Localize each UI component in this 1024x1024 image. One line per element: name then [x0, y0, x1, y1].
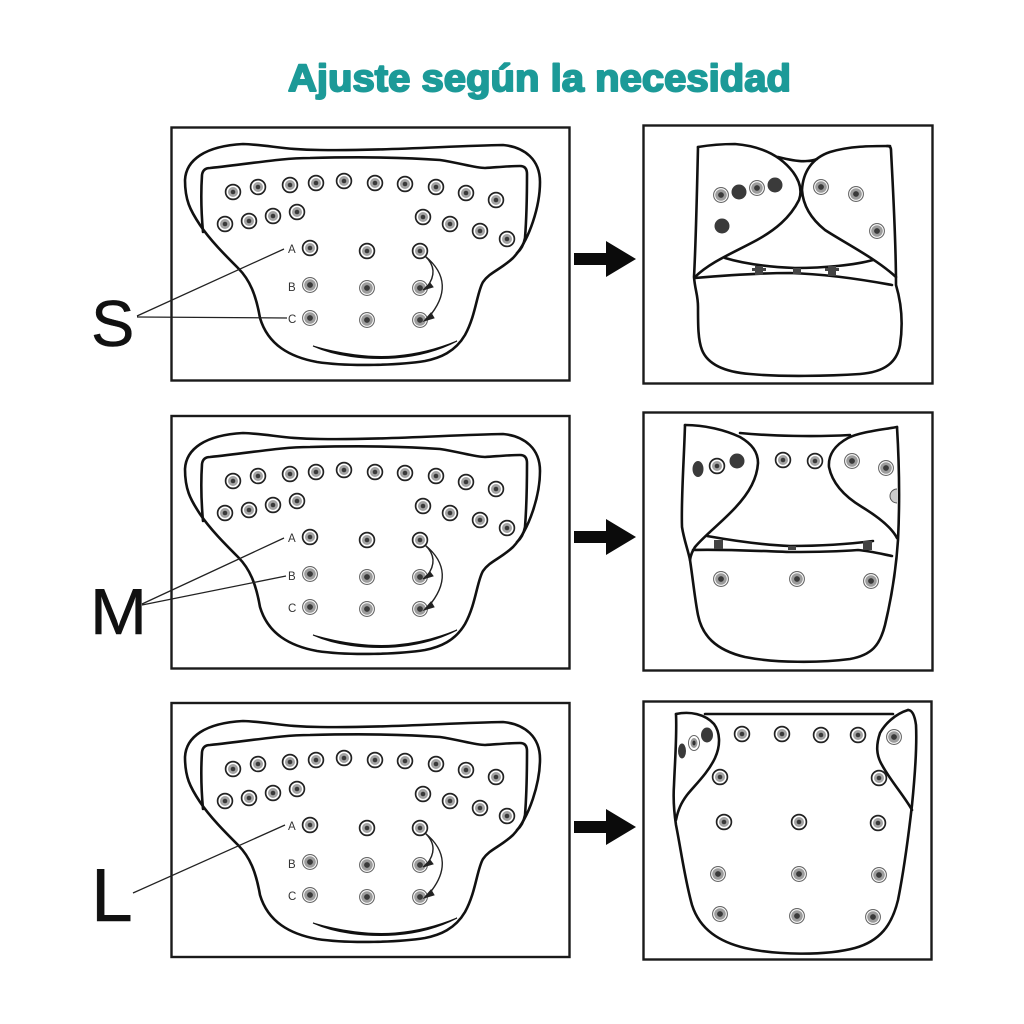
- panel: size S snap diagram: [172, 128, 570, 380]
- label: size L: L: [91, 853, 133, 937]
- label: size S: [91, 249, 287, 360]
- diaper L open: [185, 721, 540, 942]
- title: Ajuste según la necesidad: [288, 58, 791, 100]
- label: size M: M: [90, 575, 147, 648]
- panel: size M fastened diaper: [644, 412, 932, 670]
- snap tabs: [752, 266, 839, 276]
- panel: size L fastened diaper: [644, 702, 932, 960]
- diaper S open: [185, 144, 540, 365]
- arrow M: [574, 519, 636, 555]
- panel: size M snap diagram: [172, 416, 570, 668]
- label: size M: [90, 538, 286, 648]
- label: size S: S: [91, 287, 134, 360]
- label: size L: [91, 825, 285, 937]
- snap tabs: [714, 540, 872, 550]
- arrow L: [574, 809, 636, 845]
- diaper M open: [185, 433, 540, 654]
- panel: size L snap diagram: [172, 703, 570, 957]
- panel: size S fastened diaper: [644, 126, 932, 384]
- arrow S: [574, 241, 636, 277]
